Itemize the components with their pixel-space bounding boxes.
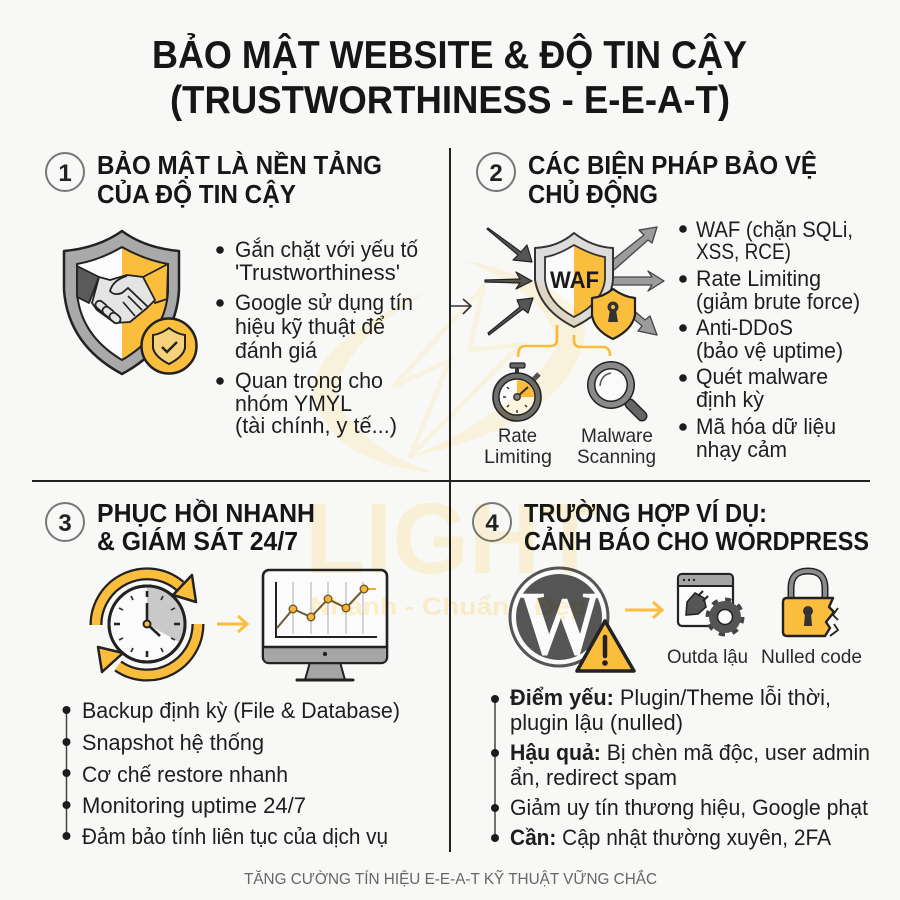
heading 3: & GIÁM SÁT 24/7: [97, 526, 298, 556]
labels: outdated and nulled code: [667, 646, 862, 668]
bullet list 4: Giảm uy tín thương hiệu, Google phạt: [510, 795, 868, 820]
panel: 4 WordPress example: [473, 498, 870, 850]
bullet list 2: (giảm brute force): [696, 289, 860, 314]
bullet list 1: hiệu kỹ thuật để: [235, 314, 385, 339]
title: [152, 32, 747, 122]
watermark: LIGHT logo: LIGHT: [305, 483, 600, 595]
arrow: clock to monitor: [217, 616, 247, 632]
number badge 4: 4: [485, 510, 499, 537]
bullet list 3: [62, 698, 400, 849]
bullet list 2: (bảo vệ uptime): [696, 338, 843, 363]
labels: outdated and nulled code: Outda lậu: [667, 646, 748, 668]
arrow: WordPress to risks: [625, 602, 662, 618]
bullet list 3: Snapshot hệ thống: [82, 730, 264, 755]
connectors: shield to tools: [518, 325, 610, 357]
bullet list 2: Quét malware: [696, 364, 828, 389]
bullet list 1: 'Trustworthiness': [235, 260, 400, 285]
heading 2: CHỦ ĐỘNG: [528, 178, 658, 209]
bullet list 1: (tài chính, y tế...): [235, 413, 397, 438]
number badge 4: [473, 503, 511, 541]
bullet list 3: Monitoring uptime 24/7: [82, 793, 306, 818]
icon: incoming and outgoing arrows: [485, 227, 664, 335]
heading 1: BẢO MẬT LÀ NỀN TẢNG: [97, 150, 382, 180]
bullet list 4: Điểm yếu: Plugin/Theme lỗi thời,: [510, 685, 831, 710]
bullet list 3: Backup định kỳ (File & Database): [82, 698, 400, 723]
bullet list 2: Mã hóa dữ liệu: [696, 414, 836, 439]
icon: magnifier: [587, 361, 642, 416]
bullet list 1: nhóm YMYL: [235, 391, 352, 416]
number badge 1: 1: [58, 160, 72, 187]
bullet list 3: Cơ chế restore nhanh: [82, 762, 288, 787]
bullet list 2: nhạy cảm: [696, 437, 787, 462]
number badge 3: [46, 503, 84, 541]
bullet list 2: WAF (chặn SQLi,: [696, 217, 853, 242]
watermark: LIGHT logo: [305, 260, 600, 621]
icon: stopwatch: [493, 363, 541, 421]
labels: rate limiting and malware scanning: [484, 425, 656, 468]
icon: backup clock: [96, 574, 198, 675]
heading 4: CẢNH BÁO CHO WORDPRESS: [524, 526, 869, 556]
bullet list 1: Quan trọng cho: [235, 368, 383, 393]
panel: 3 fast recovery and monitoring: [46, 498, 400, 849]
bullet list 2: [679, 217, 860, 462]
icon: handshake shield: [64, 231, 196, 374]
bullet list 2: Rate Limiting: [696, 266, 821, 291]
bullet list 1: Gắn chặt với yếu tố: [235, 237, 418, 262]
heading 1: [97, 150, 382, 209]
title: (TRUSTWORTHINESS - E-E-A-T): [170, 79, 730, 122]
icon: WordPress with warning: W: [518, 572, 602, 674]
icon: outdated plugin window: [678, 574, 742, 634]
labels: rate limiting and malware scanning: Limiting: [484, 446, 552, 468]
bullet list 4: plugin lậu (nulled): [510, 710, 683, 735]
heading 4: TRƯỜNG HỢP VÍ DỤ:: [524, 498, 767, 528]
panel: 1 security foundation: [46, 150, 418, 438]
number badge 3: 3: [58, 510, 72, 537]
bullet list 4: [491, 685, 870, 850]
icon: WAF shield: [535, 233, 635, 339]
icon: broken padlock: [783, 571, 838, 636]
heading 4: [524, 498, 869, 556]
bullet list 1: [216, 237, 418, 438]
panel: 2 proactive protection: [477, 150, 860, 468]
bullet list 2: XSS, RCE): [696, 239, 791, 264]
labels: rate limiting and malware scanning: Rate: [498, 425, 537, 447]
bullet list 3: Đảm bảo tính liên tục của dịch vụ: [82, 824, 388, 849]
labels: rate limiting and malware scanning: Malware: [581, 425, 653, 447]
icon: WAF shield: WAF: [550, 267, 599, 294]
bullet list 4: Hậu quả: Bị chèn mã độc, user admin: [510, 740, 870, 765]
icon: monitoring screen: [263, 570, 387, 680]
footer: TĂNG CƯỜNG TÍN HIỆU E-E-A-T KỸ THUẬT VỮNG CHẮC: [244, 868, 657, 888]
labels: outdated and nulled code: Nulled code: [761, 646, 862, 668]
bullet list 4: Cần: Cập nhật thường xuyên, 2FA: [510, 825, 831, 850]
number badge 2: [477, 153, 515, 191]
arrow: link between panels 1 and 2: [451, 299, 471, 314]
heading 2: CÁC BIỆN PHÁP BẢO VỆ: [528, 150, 817, 180]
labels: rate limiting and malware scanning: Scanning: [577, 446, 656, 468]
heading 3: [97, 498, 315, 556]
heading 3: PHỤC HỒI NHANH: [97, 498, 315, 528]
heading 2: [528, 150, 817, 209]
bullet list 4: ẩn, redirect spam: [510, 765, 677, 790]
heading 1: CỦA ĐỘ TIN CẬY: [97, 178, 296, 209]
number badge 1: [46, 153, 84, 191]
watermark: LIGHT logo: Nhanh - Chuẩn - Đẹp: [310, 593, 587, 621]
bullet list 2: định kỳ: [696, 387, 765, 412]
title: BẢO MẬT WEBSITE & ĐỘ TIN CẬY: [152, 32, 747, 77]
bullet list 1: đánh giá: [235, 338, 317, 363]
number badge 2: 2: [489, 160, 503, 187]
bullet list 2: Anti-DDoS: [696, 315, 793, 340]
bullet list 1: Google sử dụng tín: [235, 290, 413, 315]
